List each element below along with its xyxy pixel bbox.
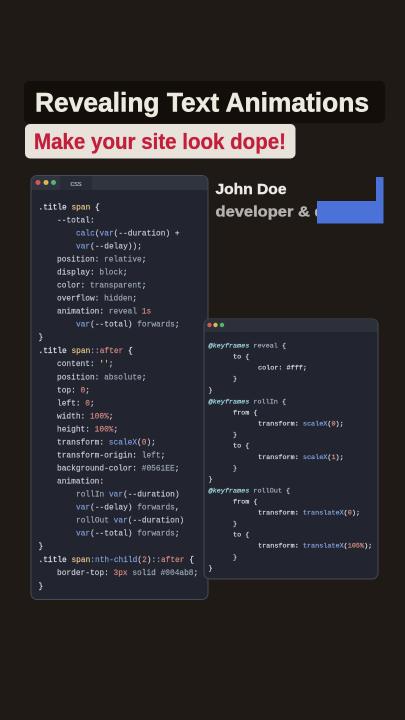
keyframes code text: } <box>233 554 237 562</box>
css code text: var(--delay) forwards, <box>76 504 180 512</box>
css code text: rollIn var(--duration) <box>76 490 180 500</box>
keyframes code text: transform: scaleX(0); <box>258 420 344 428</box>
css code text: animation: <box>57 478 104 486</box>
css code text: } <box>38 582 43 592</box>
keyframes code text: } <box>233 376 237 384</box>
tab: css <box>70 179 82 188</box>
css code text: var(--total) forwards; <box>76 320 180 330</box>
panel: css code <box>31 176 208 600</box>
demo text: John Doe <box>216 181 324 220</box>
demo text: John Doe: developer & d <box>216 204 324 220</box>
keyframes code text: color: #fff; <box>258 364 307 372</box>
keyframes code text: from { <box>233 410 257 418</box>
css code text: .title span:nth-child(2)::after { <box>38 556 194 565</box>
css code text: color: transparent; <box>57 282 146 290</box>
css code text: top: 0; <box>57 386 90 396</box>
css code text: left: 0; <box>57 400 95 408</box>
keyframes code text: } <box>208 565 213 573</box>
css code text: var(--total) forwards; <box>76 530 180 538</box>
subtitle pill: Make your site look dope! <box>34 129 286 154</box>
css code text: border-top: 3px solid #004ab8; <box>57 569 198 578</box>
subtitle pill <box>25 124 296 158</box>
keyframes code text: } <box>233 465 237 473</box>
css code text: animation: reveal 1s <box>57 308 151 316</box>
css code text: .title span { <box>38 204 100 212</box>
keyframes code text: transform: scaleX(1); <box>258 454 344 462</box>
demo text: John Doe: John Doe <box>216 181 286 198</box>
keyframes code text <box>208 342 372 573</box>
css code text: } <box>38 542 43 552</box>
keyframes code text: } <box>233 432 237 440</box>
keyframes code text: } <box>208 476 213 484</box>
css code text: background-color: #0561EE; <box>57 464 179 474</box>
window dots <box>207 323 224 327</box>
title banner <box>24 81 385 123</box>
keyframes code text: @keyframes reveal { <box>208 342 286 350</box>
css code text: overflow: hidden; <box>57 294 137 304</box>
keyframes code text: @keyframes rollIn { <box>208 398 286 406</box>
css code text: display: block; <box>57 268 128 278</box>
css code text: transform-origin: left; <box>57 452 165 460</box>
css code text: rollOut var(--duration) <box>76 516 184 526</box>
keyframes code text: @keyframes rollOut { <box>208 488 290 496</box>
css code text: width: 100%; <box>57 412 114 422</box>
keyframes code text: transform: translateX(105%); <box>258 542 372 550</box>
css code text: } <box>38 334 43 342</box>
keyframes code text: to { <box>233 532 249 540</box>
css code text: --total: <box>57 216 95 226</box>
keyframes code text: } <box>208 387 213 395</box>
css code text: content: ''; <box>57 360 114 369</box>
css code text <box>38 204 198 592</box>
panel: keyframes code <box>204 319 378 579</box>
css code text: calc(var(--duration) + <box>76 230 180 238</box>
css code text: position: relative; <box>57 256 146 264</box>
keyframes code text: to { <box>233 354 249 362</box>
css code text: .title span::after { <box>38 347 133 356</box>
keyframes code text: } <box>233 520 237 528</box>
keyframes code text: to { <box>233 442 249 450</box>
css code text: transform: scaleX(0); <box>57 438 156 448</box>
keyframes code text: transform: translateX(0); <box>258 510 360 518</box>
title banner: Revealing Text Animations <box>35 88 369 118</box>
blue reveal bar <box>317 177 384 224</box>
tab <box>60 176 92 190</box>
css code text: var(--delay)); <box>76 242 142 252</box>
css code text: height: 100%; <box>57 426 118 434</box>
css code text: position: absolute; <box>57 374 146 382</box>
window dots <box>36 180 56 185</box>
keyframes code text: from { <box>233 498 257 506</box>
